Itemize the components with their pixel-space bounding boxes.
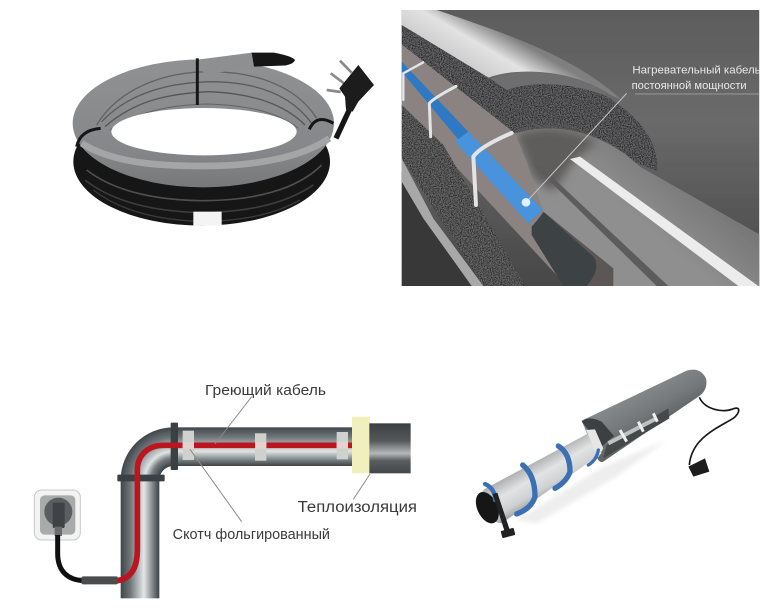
pipe elbow xyxy=(121,427,173,480)
foam insulation upper xyxy=(402,25,657,171)
callout text: постоянной мощности xyxy=(632,80,747,92)
bottom-left dark area xyxy=(402,172,472,286)
silver jacket xyxy=(402,10,622,100)
panel: insulated pipe 3D render xyxy=(471,370,739,538)
label: thermal insulation: Теплоизоляция xyxy=(298,499,417,516)
cable junction sleeve xyxy=(81,576,118,584)
steel pipe xyxy=(476,433,602,523)
wall socket xyxy=(34,490,80,540)
black power cord xyxy=(58,535,83,581)
lower foam insulation xyxy=(402,105,525,286)
cable crossing tape xyxy=(183,442,348,449)
black cable tie xyxy=(493,493,515,538)
coil: black lower turns xyxy=(73,98,330,226)
panel: pipe insulation cutaway xyxy=(402,10,761,286)
callout leader line and dot xyxy=(522,93,759,207)
leader lines xyxy=(190,397,370,522)
power cord xyxy=(689,397,739,465)
dark background xyxy=(402,10,759,286)
power cord and plug xyxy=(327,61,374,138)
lower silver edge xyxy=(402,158,483,286)
inner cavity xyxy=(490,72,610,94)
white stripe on pipe xyxy=(570,157,758,286)
pipe body xyxy=(515,128,759,286)
dark inner pipe zone xyxy=(515,128,597,192)
cable end connector xyxy=(532,212,596,286)
sleeve slit with foil tape xyxy=(603,408,669,458)
panel: heating cable diagram xyxy=(34,383,417,598)
horizontal pipe xyxy=(173,427,352,466)
label: heating cable: Греющий кабель xyxy=(205,383,326,399)
soft ground shadow xyxy=(517,440,667,523)
panel: coiled heating cable photo xyxy=(73,53,374,226)
pipe shaded left band xyxy=(402,44,557,276)
heating cable red xyxy=(117,445,352,581)
foil tape strips xyxy=(183,431,348,461)
coil: grey upper turns xyxy=(73,59,334,187)
white mounting straps xyxy=(403,62,512,205)
insulation end ring xyxy=(352,417,370,473)
grey foam insulation sleeve xyxy=(582,370,706,462)
coil: free cable end with black sleeve xyxy=(190,53,295,75)
blue cable loops xyxy=(485,446,598,514)
callout text: Нагревательный кабель xyxy=(632,64,761,76)
connector recess xyxy=(532,212,613,286)
coil: inner opening xyxy=(111,108,297,155)
blue heating cable xyxy=(402,62,543,223)
pipe flanges xyxy=(117,423,178,481)
insulation wrapped pipe xyxy=(369,423,411,473)
dark groove on pipe xyxy=(533,164,668,286)
cable ties xyxy=(77,58,333,147)
white label on coil xyxy=(193,212,222,226)
plug xyxy=(688,458,709,477)
callout text xyxy=(632,64,761,92)
pipe open end xyxy=(471,488,503,527)
vertical pipe xyxy=(121,480,159,598)
label: foil tape: Скотч фольгированный xyxy=(173,527,330,543)
collar at sleeve xyxy=(586,429,603,457)
